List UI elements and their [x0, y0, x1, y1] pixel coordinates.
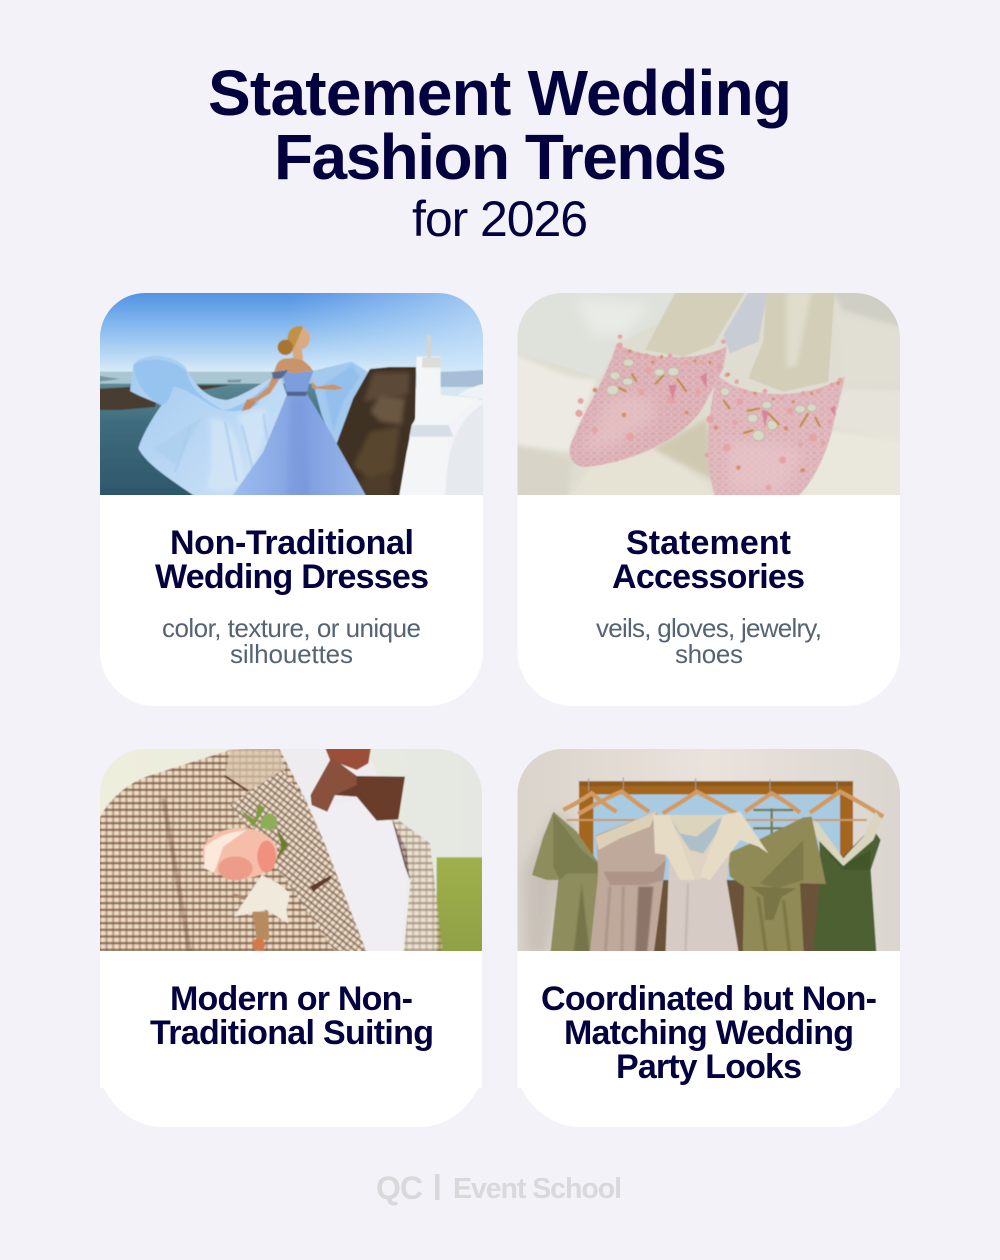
heading: Matching Wedding [564, 1014, 854, 1052]
card background [518, 480, 900, 706]
panel: coordinated wedding party looks [512, 742, 908, 1127]
title: for 2026 [412, 191, 588, 247]
heading [155, 524, 429, 596]
head and hair [293, 328, 310, 349]
hangers [563, 792, 883, 817]
heading: Party Looks [616, 1048, 802, 1086]
beads and gems [575, 334, 842, 491]
right veil [310, 362, 370, 448]
logo: QC Event School: QC [376, 1170, 423, 1206]
heading: Traditional Suiting [150, 1014, 434, 1052]
description: silhouettes [230, 639, 353, 669]
heading: Accessories [612, 558, 805, 596]
bodice and belt [282, 370, 313, 393]
logo: QC Event School [376, 1170, 622, 1206]
heading: Modern or Non- [170, 980, 413, 1018]
title: Fashion Trends [274, 121, 727, 193]
photo: woman in flowing blue gown on a cliff [93, 287, 490, 502]
photo: checked jacket, bow tie and rose boutonniere [100, 749, 482, 951]
title: Statement Wedding [208, 57, 792, 129]
shirt [277, 743, 410, 957]
jacket [93, 747, 368, 957]
dress 5 green [813, 827, 881, 957]
panel: statement accessories [512, 287, 908, 706]
cliff [335, 367, 416, 502]
framed painting [578, 781, 854, 858]
heading: Non-Traditional [170, 524, 414, 562]
dress 1 olive [532, 812, 600, 957]
panel: non-traditional wedding dresses [93, 287, 490, 706]
dress 2 taupe [589, 811, 666, 957]
heels [724, 293, 766, 353]
dress 4 olive [727, 817, 826, 957]
card background [100, 940, 482, 1127]
gown skirt [232, 394, 366, 495]
rose boutonniere [203, 803, 290, 951]
skin [246, 358, 313, 405]
logo: QC Event School: Event School [453, 1173, 622, 1205]
heading [612, 524, 805, 596]
title [208, 57, 792, 247]
card background [100, 480, 483, 706]
white building [398, 357, 479, 502]
right shoe [708, 375, 845, 502]
description [596, 613, 822, 669]
heading [150, 980, 434, 1052]
description [162, 613, 421, 669]
dress 3 cream [665, 853, 739, 957]
veil straps [272, 370, 288, 379]
photo: beaded pink lace shoes on cream fabric [512, 287, 908, 502]
heading: Wedding Dresses [155, 558, 429, 596]
photo: five bridesmaid dresses on wooden hangers [518, 749, 900, 951]
left veil [130, 356, 287, 502]
card background [518, 940, 900, 1127]
bow tie [311, 757, 405, 821]
neck [325, 749, 372, 770]
heading: Statement [626, 524, 791, 562]
description: veils, gloves, jewelry, [596, 613, 822, 643]
heading: Coordinated but Non- [541, 980, 877, 1018]
panel: modern or non-traditional suiting [92, 742, 490, 1127]
description: color, texture, or unique [162, 613, 421, 643]
description: shoes [675, 639, 743, 669]
heading [541, 980, 877, 1086]
left shoe [570, 343, 727, 467]
